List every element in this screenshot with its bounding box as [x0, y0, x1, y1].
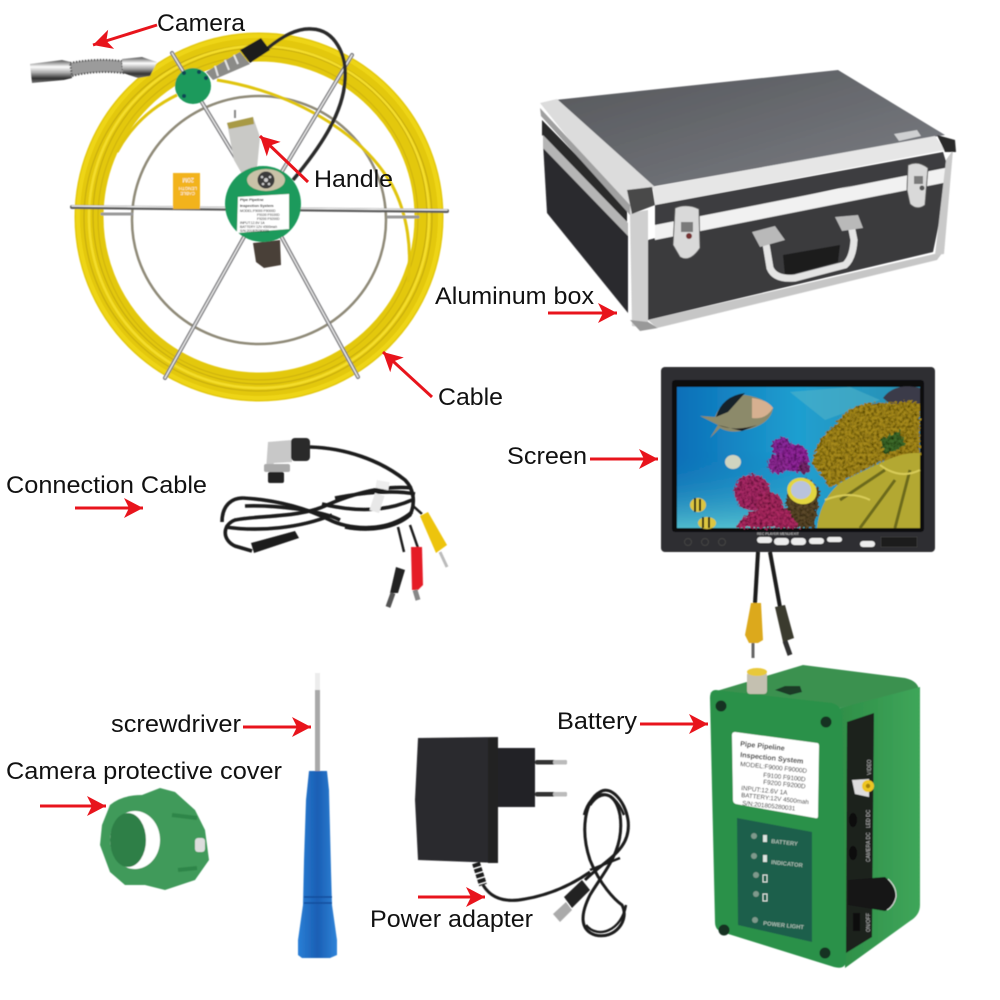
green hub	[225, 166, 301, 242]
power adapter	[415, 737, 628, 936]
connection cable	[222, 438, 447, 607]
small fish	[725, 455, 741, 469]
large fish	[700, 395, 773, 438]
small green cable clamp	[175, 68, 211, 104]
indicator panel: INDICATOR	[771, 860, 804, 869]
arrow: aluminum box	[548, 312, 617, 314]
spec label: F9100 F9100D	[763, 772, 806, 783]
arrow: screen	[590, 458, 658, 460]
cable length tag: CABLE	[180, 191, 195, 196]
yellow RCA plug	[420, 512, 447, 567]
latches	[673, 163, 928, 259]
spec label: F9200 F9200D	[763, 779, 806, 790]
black DC plug	[388, 567, 405, 607]
cable length tag	[173, 173, 200, 209]
spec label: INPUT:12.6V 1A	[741, 785, 789, 797]
steel frame spokes	[72, 53, 447, 378]
black camera lead	[206, 29, 345, 180]
label: Cable	[383, 352, 503, 411]
green hub: S/N:201805280031	[240, 229, 269, 233]
lid	[555, 70, 945, 187]
indicator panel: POWER LIGHT	[763, 921, 805, 931]
camera protective cover	[100, 788, 209, 890]
front panel	[648, 160, 947, 320]
monitor bezel	[661, 367, 935, 552]
adapter cord	[476, 790, 628, 936]
label: Screen: Screen	[507, 443, 587, 470]
arrow: protective cover	[40, 804, 106, 808]
plug pins	[535, 760, 567, 796]
cable coils	[222, 447, 422, 552]
arrow: power adapter	[418, 896, 485, 898]
top RCA jack and port	[747, 668, 802, 695]
left side panel	[543, 143, 628, 313]
green hub: Pipe Pipeline	[240, 198, 264, 202]
arrow: battery	[640, 722, 708, 726]
screwdriver	[298, 673, 337, 958]
red DC plug	[411, 547, 423, 600]
spec label: S/N:201805280031	[742, 800, 796, 813]
side control panel: LED DC	[866, 809, 872, 828]
inspection camera head	[30, 57, 157, 83]
green hub: INPUT:12.6V 1A	[240, 221, 265, 225]
green hub: BATTERY:12V 4500mah	[240, 225, 277, 229]
arrow: handle	[260, 136, 308, 182]
aluminium rails	[540, 99, 655, 215]
yellow angel fish	[783, 474, 821, 508]
green hub: Inspection System	[240, 204, 274, 208]
label: screwdriver: screwdriver	[111, 711, 241, 738]
label: Cable: Cable	[438, 384, 503, 411]
arrow: connection cable	[75, 506, 143, 510]
label: Connection Cable: Connection Cable	[6, 472, 207, 499]
screen monitor	[661, 367, 935, 658]
front face	[710, 690, 846, 968]
top face	[710, 665, 919, 708]
cable length tag: LENGTH	[179, 186, 197, 191]
label: Battery: Battery	[557, 708, 637, 735]
handle	[227, 110, 281, 268]
underwater picture	[677, 386, 920, 529]
box handle	[752, 215, 863, 278]
arrow: camera	[93, 25, 157, 45]
yellow cable coil	[78, 36, 440, 398]
indicator panel	[737, 818, 812, 942]
side control panel: CAMERA DC	[866, 832, 872, 862]
label: Power adapter: Power adapter	[370, 906, 533, 933]
side control panel: VIDEO	[867, 759, 873, 775]
monitor buttons	[684, 532, 917, 547]
spec label: MODEL:F9000 F9000D	[740, 761, 808, 775]
label: Camera protective cover: Camera protective cover	[6, 758, 282, 785]
side control panel	[846, 713, 896, 953]
green hub: MODEL:F9000 F9000D	[240, 209, 276, 213]
arrow: cable	[383, 352, 432, 397]
arrow: screwdriver	[243, 726, 311, 728]
indicator panel: BATTERY	[771, 839, 798, 848]
video and power leads	[745, 552, 794, 658]
monitor buttons: REC PLAYER MENU/EXIT	[757, 532, 800, 536]
cable length tag: 20M	[182, 176, 194, 182]
label: Handle	[260, 136, 393, 193]
angled connector	[264, 438, 310, 483]
side face	[840, 687, 920, 968]
cable reel	[30, 29, 447, 398]
label: Camera: Camera	[157, 10, 246, 37]
label: Aluminum box: Aluminum box	[435, 283, 594, 310]
aluminum box	[540, 70, 956, 331]
spec label: BATTERY:12V 4500mah	[741, 792, 810, 806]
green hub: F9100 F9100D	[257, 213, 280, 217]
label: Handle: Handle	[314, 166, 393, 193]
inner steel ring	[132, 96, 386, 344]
green hub: F9200 F9200D	[257, 217, 280, 221]
side control panel: ON/OFF	[866, 913, 872, 932]
battery box	[710, 665, 920, 968]
spec label	[732, 732, 819, 818]
spec label: Pipe Pipeline	[740, 739, 785, 753]
screw holes	[716, 700, 832, 958]
label: Camera	[93, 10, 246, 45]
spec label: Inspection System	[740, 750, 804, 766]
